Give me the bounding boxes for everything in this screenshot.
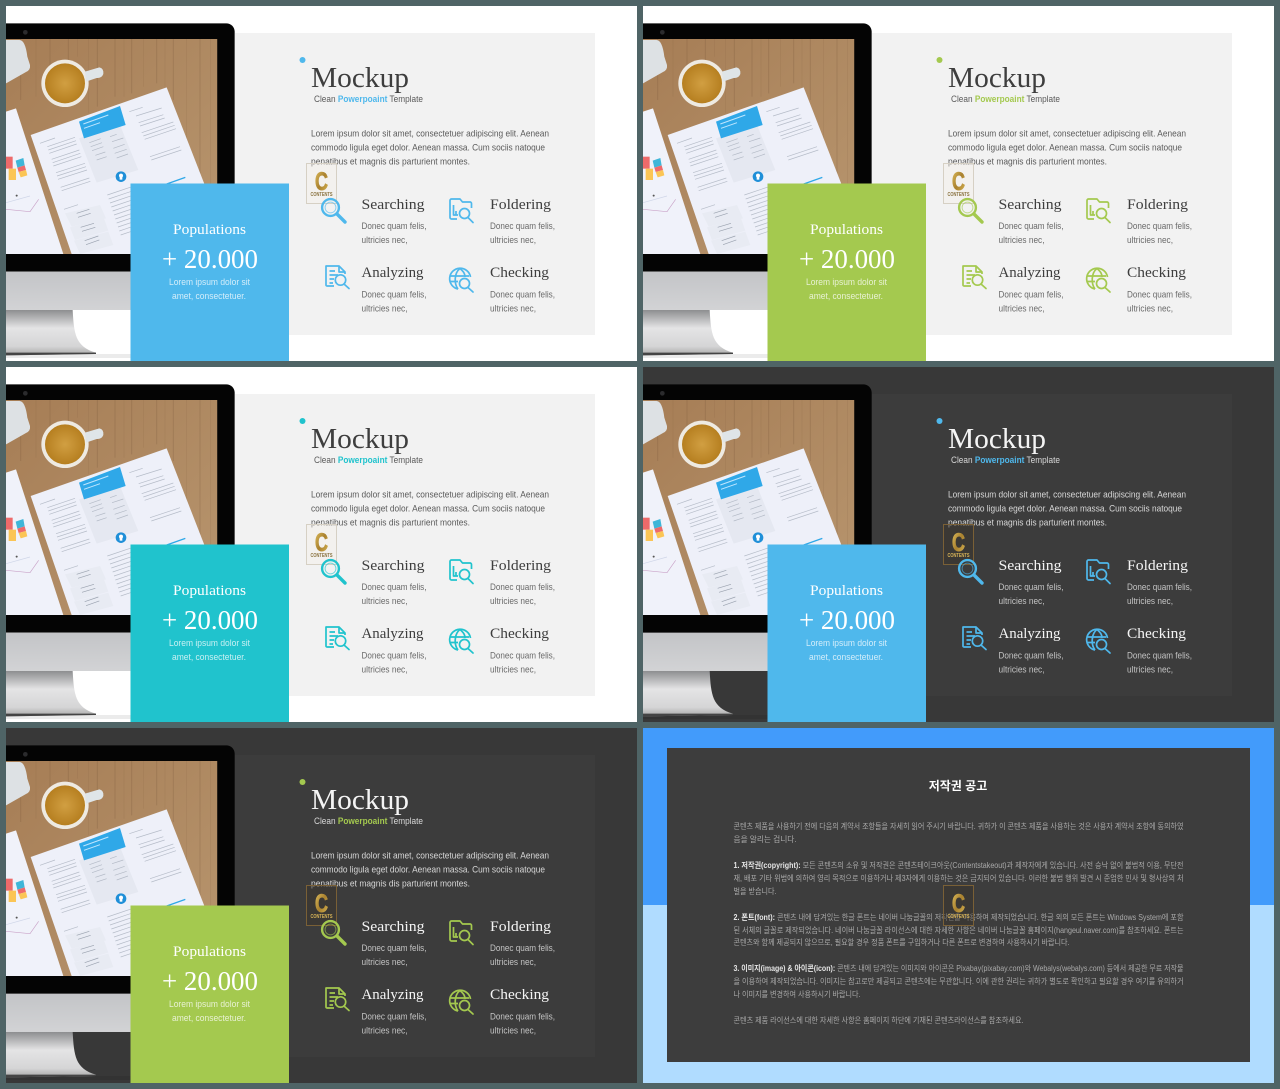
- feature: analyzing: [362, 626, 426, 674]
- feature: analyzing: Analyzing: [362, 626, 424, 642]
- feature: analyzing: ultricies nec,: [362, 664, 408, 674]
- stat card: [768, 184, 926, 361]
- feature: checking: ultricies nec,: [490, 1026, 536, 1036]
- subtitle: Clean Powerpoaint Template: [314, 94, 423, 104]
- feature: foldering: ultricies nec,: [1127, 235, 1173, 245]
- icon: globe: [450, 990, 473, 1014]
- watermark: CONTENTS: [310, 553, 333, 559]
- slide 4: blue dark: [643, 367, 1274, 722]
- icon: folder: [450, 199, 473, 222]
- icon: search: [959, 199, 982, 222]
- stat card: [130, 544, 289, 722]
- body text: penatibus et magnis dis parturient montes.: [948, 156, 1107, 166]
- image and icon paragraph: [734, 963, 1184, 999]
- watermark: CONTENTS: [310, 914, 333, 920]
- body text: [948, 490, 1186, 528]
- heading: Mockup: [948, 63, 1046, 94]
- font paragraph: 콘텐츠와 함께 제공되지 않으므로, 필요할 경우 정품 폰트를 구입하거나 다른 폰트로 변경하여 사용하시기 바랍니다.: [734, 937, 1070, 947]
- body text: commodo ligula eget dolor. Aenean massa. Cum sociis natoque: [311, 504, 545, 514]
- stat card: [130, 906, 289, 1083]
- feature: analyzing: [998, 265, 1064, 314]
- stat card: amet, consectetuer.: [172, 1013, 246, 1023]
- accent dot: [936, 418, 942, 424]
- watermark: [944, 524, 974, 564]
- feature: searching: ultricies nec,: [362, 596, 408, 606]
- feature: checking: Donec quam felis,: [490, 290, 555, 300]
- stat card: + 20.000: [162, 605, 258, 635]
- icon: search: [959, 560, 982, 583]
- feature: foldering: [490, 558, 555, 606]
- feature: searching: Donec quam felis,: [362, 221, 426, 231]
- stat card: amet, consectetuer.: [809, 291, 883, 301]
- feature: searching: Donec quam felis,: [998, 582, 1064, 592]
- feature: foldering: Donec quam felis,: [490, 943, 555, 953]
- image and icon paragraph: 나 이미지를 변경하여 사용하시기 바랍니다.: [734, 989, 860, 999]
- feature: foldering: ultricies nec,: [490, 596, 536, 606]
- icon: globe: [450, 629, 473, 653]
- text panel: [235, 33, 595, 335]
- monitor mockup: [6, 384, 237, 719]
- feature: analyzing: Analyzing: [362, 265, 424, 281]
- feature: searching: [362, 197, 426, 245]
- body text: penatibus et magnis dis parturient montes.: [948, 518, 1107, 528]
- icon: globe: [1087, 629, 1110, 653]
- feature: checking: Donec quam felis,: [1127, 650, 1192, 660]
- dark notice panel: [667, 748, 1250, 1062]
- stat card: Lorem ipsum dolor sit: [806, 638, 887, 648]
- feature: searching: Searching: [998, 558, 1062, 574]
- body text: Lorem ipsum dolor sit amet, consectetuer adipiscing elit. Aenean: [311, 128, 549, 138]
- stat card: Lorem ipsum dolor sit: [169, 277, 250, 287]
- feature: analyzing: [362, 987, 426, 1036]
- intro paragraph: 음을 알리는 겁니다.: [734, 834, 796, 844]
- body text: [311, 850, 549, 888]
- image and icon paragraph: 을 이용하여 제작되었습니다. 이미지는 참고로만 제공되고 콘텐츠에는 무관합니다. 이에 관한 권리는 귀하가 별도로 확인하고 필요할 경우 여기를 유의하거: [734, 976, 1184, 986]
- feature: analyzing: Analyzing: [998, 626, 1061, 642]
- feature: searching: Donec quam felis,: [362, 582, 426, 592]
- slide background: [643, 367, 1274, 722]
- feature: checking: Checking: [490, 987, 550, 1003]
- body text: commodo ligula eget dolor. Aenean massa. Cum sociis natoque: [948, 142, 1182, 152]
- slide 1: blue light: [6, 6, 637, 361]
- feature: searching: [362, 558, 426, 606]
- heading: Mockup: [311, 785, 409, 816]
- body text: Lorem ipsum dolor sit amet, consectetuer adipiscing elit. Aenean: [311, 850, 549, 860]
- font paragraph: [734, 912, 1184, 947]
- intro paragraph: 콘텐츠 제품을 사용하기 전에 다음의 계약서 조항들을 자세히 읽어 주시기 바랍니다. 귀하가 이 콘텐츠 제품을 사용하는 것은 사용자 계약서 조항에 동의하였: [734, 821, 1184, 831]
- icon: folder: [450, 921, 473, 944]
- feature: foldering: Donec quam felis,: [1127, 221, 1192, 231]
- feature: analyzing: Donec quam felis,: [998, 290, 1064, 300]
- text panel: [872, 394, 1232, 696]
- feature: foldering: Donec quam felis,: [490, 221, 555, 231]
- watermark: CONTENTS: [948, 553, 970, 559]
- feature: searching: ultricies nec,: [998, 596, 1044, 606]
- subtitle: Clean Powerpoaint Template: [314, 816, 423, 826]
- slide 5: green dark: [6, 728, 637, 1083]
- slide background: [6, 367, 637, 722]
- stat card: Lorem ipsum dolor sit: [806, 277, 887, 287]
- feature: foldering: Foldering: [490, 558, 552, 574]
- stat card: [130, 184, 289, 361]
- feature: analyzing: Donec quam felis,: [362, 650, 426, 660]
- feature: foldering: ultricies nec,: [1127, 596, 1173, 606]
- icon: globe: [450, 268, 473, 292]
- icon: document: [963, 266, 986, 288]
- monitor mockup: [6, 23, 237, 358]
- heading: Mockup: [311, 424, 409, 455]
- feature: foldering: Foldering: [1127, 197, 1189, 213]
- icon: search: [322, 921, 345, 944]
- feature: analyzing: ultricies nec,: [998, 664, 1044, 674]
- feature: searching: Donec quam felis,: [362, 943, 426, 953]
- stat card: amet, consectetuer.: [809, 652, 883, 662]
- body text: [948, 128, 1186, 166]
- body text: penatibus et magnis dis parturient montes.: [311, 878, 470, 888]
- feature: searching: ultricies nec,: [998, 235, 1044, 245]
- watermark: C: [952, 168, 965, 196]
- feature: analyzing: Donec quam felis,: [362, 290, 426, 300]
- feature: checking: Checking: [1127, 626, 1187, 642]
- heading: Mockup: [948, 424, 1046, 455]
- copyright paragraph: 재, 배포 기타 위법에 의하여 영리 목적으로 이용하거나 제3자에게 이용하는 것은 금지되어 있습니다. 이러한 불법 행위 발견 시 준엄한 민사 및 형사상의 처: [734, 873, 1184, 883]
- image and icon paragraph: 3. 이미지(image) & 아이콘(icon): 콘텐츠 내에 담겨있는 이미지와 아이콘은 Pixabay(pixabay.com)와 Webalys(webalys.com) 등에서 제공한 무료 저작물: [734, 963, 1184, 973]
- feature: searching: [998, 558, 1064, 606]
- feature: foldering: [1127, 558, 1192, 606]
- intro paragraph: [734, 821, 1184, 844]
- stat card: + 20.000: [162, 966, 258, 996]
- stat card: + 20.000: [799, 244, 895, 274]
- stat card: + 20.000: [162, 244, 258, 274]
- slide 2: green light: [643, 6, 1274, 361]
- body text: [311, 490, 549, 528]
- feature: checking: [490, 265, 555, 314]
- text panel: [235, 755, 595, 1057]
- license note: 콘텐츠 제품 라이선스에 대한 자세한 사항은 홈페이지 하단에 기재된 콘텐츠라이선스를 참조하세요.: [734, 1015, 1024, 1025]
- feature: analyzing: ultricies nec,: [362, 304, 408, 314]
- body text: commodo ligula eget dolor. Aenean massa. Cum sociis natoque: [948, 504, 1182, 514]
- feature: analyzing: Donec quam felis,: [362, 1012, 426, 1022]
- feature: foldering: Donec quam felis,: [1127, 582, 1192, 592]
- slide background: [643, 6, 1274, 361]
- feature: searching: Donec quam felis,: [998, 221, 1064, 231]
- stat card: + 20.000: [799, 605, 895, 635]
- feature: checking: [1127, 265, 1192, 314]
- feature: foldering: Foldering: [490, 919, 552, 935]
- watermark: [944, 886, 974, 926]
- accent dot: [300, 418, 306, 424]
- body text: Lorem ipsum dolor sit amet, consectetuer adipiscing elit. Aenean: [948, 128, 1186, 138]
- stat card: Populations: [810, 222, 883, 238]
- icon: folder: [1087, 199, 1110, 222]
- body text: commodo ligula eget dolor. Aenean massa. Cum sociis natoque: [311, 864, 545, 874]
- watermark: [306, 524, 336, 564]
- icon: document: [963, 627, 986, 650]
- accent dot: [300, 57, 306, 63]
- font paragraph: 된 서체의 글꼴로 제작되었습니다. 네이버 나눔글꼴 라이선스에 대한 자세한 사항은 네이버 나눔글꼴 홈페이지(hangeul.naver.com)를 참조하세요. 폰트는: [734, 925, 1184, 935]
- feature: foldering: Foldering: [1127, 558, 1189, 574]
- feature: checking: ultricies nec,: [490, 304, 536, 314]
- feature: searching: [362, 919, 426, 967]
- feature: checking: Donec quam felis,: [490, 1012, 555, 1022]
- lower light blue background: [643, 905, 1274, 1083]
- feature: searching: Searching: [362, 919, 425, 935]
- feature: foldering: Foldering: [490, 197, 552, 213]
- icon: document: [326, 266, 349, 288]
- body text: penatibus et magnis dis parturient montes.: [311, 156, 470, 166]
- monitor mockup: [6, 745, 237, 1080]
- heading: Mockup: [311, 63, 409, 94]
- feature: foldering: [1127, 197, 1192, 245]
- body text: penatibus et magnis dis parturient montes.: [311, 518, 470, 528]
- feature: checking: ultricies nec,: [1127, 304, 1173, 314]
- feature: searching: ultricies nec,: [362, 235, 408, 245]
- feature: foldering: ultricies nec,: [490, 957, 536, 967]
- stat card: amet, consectetuer.: [172, 291, 246, 301]
- copyright paragraph: [734, 860, 1184, 896]
- watermark: C: [952, 890, 965, 918]
- feature: checking: Checking: [490, 265, 550, 281]
- stat card: Lorem ipsum dolor sit: [169, 999, 250, 1009]
- stat card: Populations: [810, 583, 883, 599]
- icon: globe: [1087, 268, 1110, 292]
- feature: checking: [1127, 626, 1192, 674]
- icon: document: [326, 627, 349, 650]
- body text: [311, 128, 549, 166]
- feature: analyzing: [362, 265, 426, 314]
- subtitle: Clean Powerpoaint Template: [951, 94, 1060, 104]
- feature: foldering: [490, 197, 555, 245]
- slide 3: teal light: [6, 367, 637, 722]
- slide background: [6, 6, 637, 361]
- body text: commodo ligula eget dolor. Aenean massa. Cum sociis natoque: [311, 142, 545, 152]
- feature: foldering: [490, 919, 555, 967]
- feature: checking: Donec quam felis,: [490, 650, 555, 660]
- watermark: C: [315, 529, 328, 557]
- feature: checking: Checking: [1127, 265, 1187, 281]
- feature: checking: [490, 987, 555, 1036]
- feature: checking: ultricies nec,: [1127, 664, 1173, 674]
- watermark: [944, 164, 974, 204]
- subtitle: Clean Powerpoaint Template: [314, 455, 423, 465]
- feature: foldering: ultricies nec,: [490, 235, 536, 245]
- slide background: [6, 728, 637, 1083]
- body text: Lorem ipsum dolor sit amet, consectetuer adipiscing elit. Aenean: [948, 490, 1186, 500]
- feature: checking: Donec quam felis,: [1127, 290, 1192, 300]
- feature: checking: [490, 626, 555, 674]
- feature: searching: [998, 197, 1064, 245]
- slide 6: copyright notice: [643, 728, 1274, 1083]
- feature: analyzing: Analyzing: [362, 987, 424, 1003]
- accent dot: [936, 57, 942, 63]
- feature: analyzing: Analyzing: [998, 265, 1061, 281]
- icon: document: [326, 988, 349, 1010]
- stat card: Populations: [173, 583, 246, 599]
- monitor mockup: [643, 384, 874, 719]
- body text: Lorem ipsum dolor sit amet, consectetuer adipiscing elit. Aenean: [311, 490, 549, 500]
- notice title: 저작권 공고: [929, 778, 987, 793]
- feature: analyzing: Donec quam felis,: [998, 650, 1064, 660]
- text panel: [872, 33, 1232, 335]
- monitor mockup: [643, 23, 874, 358]
- watermark: C: [315, 890, 328, 918]
- watermark: CONTENTS: [310, 192, 333, 198]
- feature: searching: Searching: [998, 197, 1062, 213]
- copyright paragraph: 1. 저작권(copyright): 모든 콘텐츠의 소유 및 저작권은 콘텐츠테이크아웃(Contentstakeout)과 제작자에게 있습니다. 사전 승낙 없이 불법적 이용, 무단전: [734, 860, 1184, 870]
- stat card: amet, consectetuer.: [172, 652, 246, 662]
- watermark: CONTENTS: [948, 914, 970, 920]
- feature: checking: Checking: [490, 626, 550, 642]
- stat card: Populations: [173, 944, 246, 960]
- font paragraph: 2. 폰트(font): 콘텐츠 내에 담겨있는 한글 폰트는 네이버 나눔글꼴의 저작권을 이용하여 제작되었습니다. 한글 외의 모든 폰트는 Windows System에 포함: [734, 912, 1184, 922]
- stat card: Lorem ipsum dolor sit: [169, 638, 250, 648]
- feature: analyzing: ultricies nec,: [998, 304, 1044, 314]
- watermark: C: [315, 168, 328, 196]
- watermark: [306, 164, 336, 204]
- feature: searching: Searching: [362, 197, 425, 213]
- copyright paragraph: 벌을 받습니다.: [734, 886, 776, 896]
- icon: folder: [1087, 560, 1110, 584]
- stat card: Populations: [173, 222, 246, 238]
- icon: search: [322, 199, 345, 222]
- stat card: [768, 544, 926, 722]
- text panel: [235, 394, 595, 696]
- watermark: C: [952, 529, 965, 557]
- feature: searching: Searching: [362, 558, 425, 574]
- feature: analyzing: [998, 626, 1064, 674]
- accent dot: [300, 779, 306, 785]
- feature: foldering: Donec quam felis,: [490, 582, 555, 592]
- upper blue background: [643, 728, 1274, 905]
- watermark: [306, 886, 336, 926]
- icon: folder: [450, 560, 473, 584]
- feature: checking: ultricies nec,: [490, 664, 536, 674]
- feature: analyzing: ultricies nec,: [362, 1026, 408, 1036]
- subtitle: Clean Powerpoaint Template: [951, 455, 1060, 465]
- feature: searching: ultricies nec,: [362, 957, 408, 967]
- icon: search: [322, 560, 345, 583]
- watermark: CONTENTS: [948, 192, 970, 198]
